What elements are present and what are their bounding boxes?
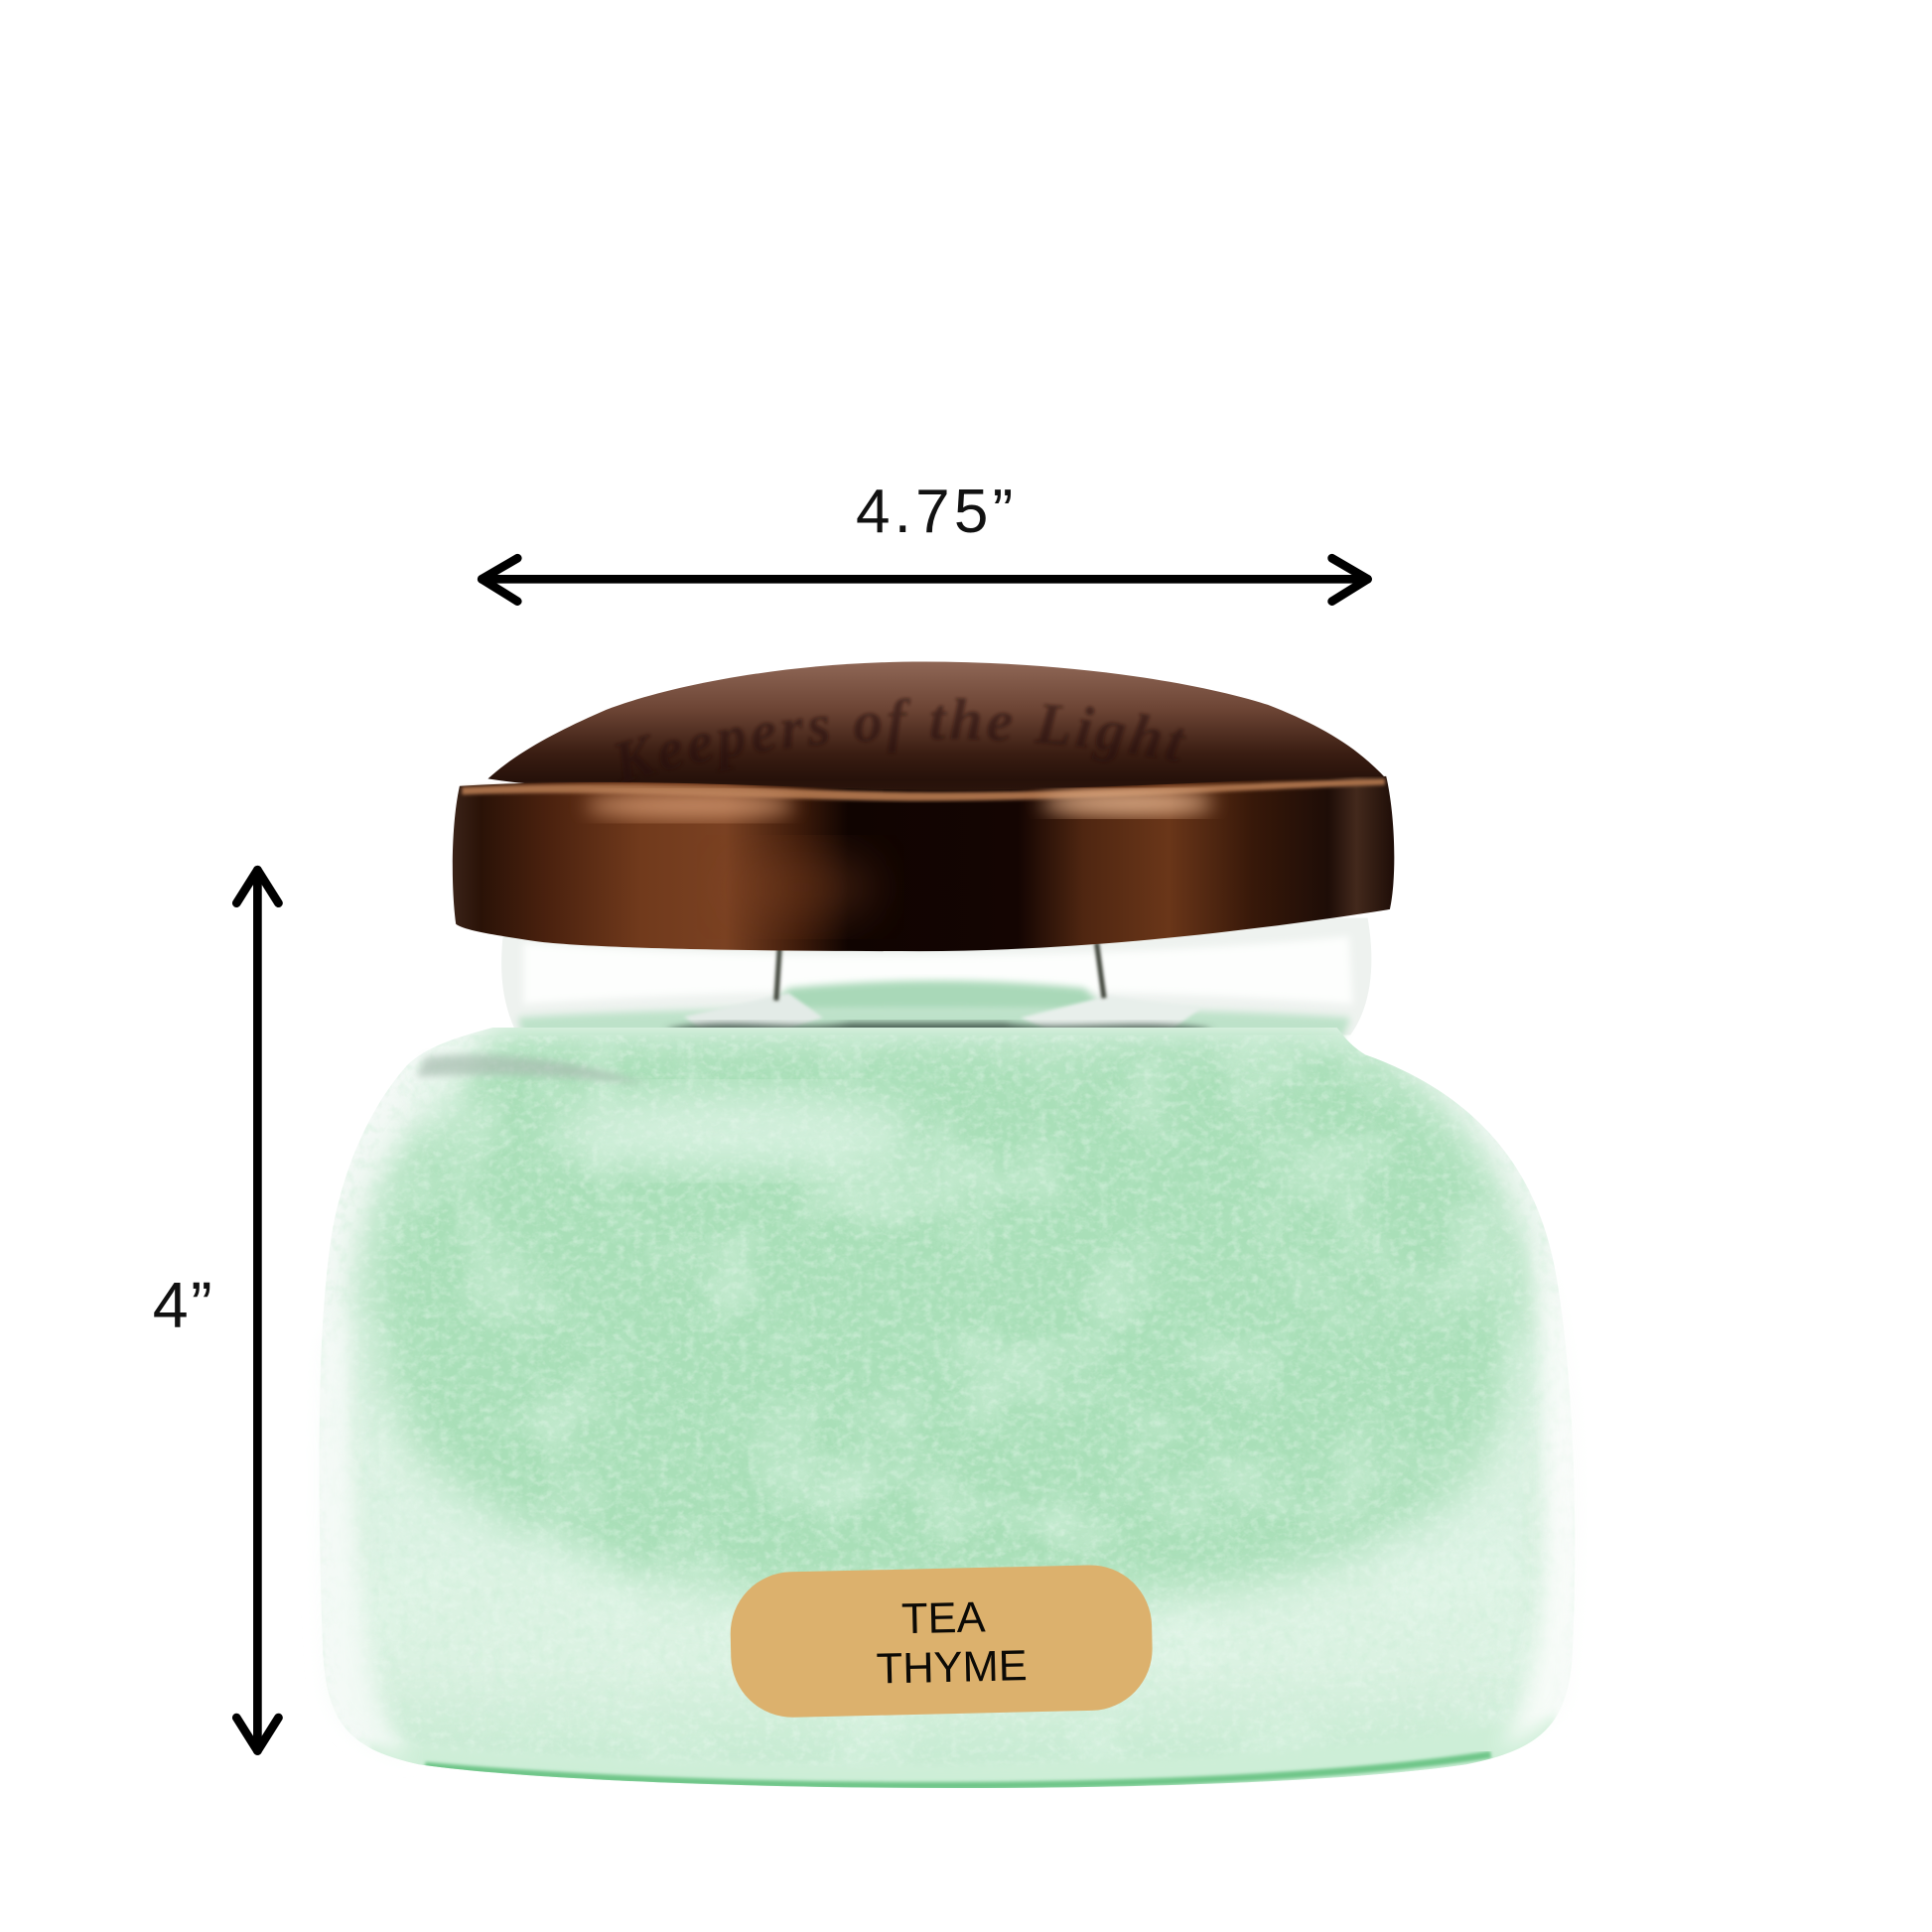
lid band highlights <box>462 778 1385 924</box>
wax fill <box>308 1033 1589 1811</box>
width label: 4.75” <box>856 478 1017 546</box>
width arrow <box>482 558 1368 602</box>
wax texture <box>308 1035 1589 1799</box>
height label: 4” <box>153 1270 214 1341</box>
name label <box>729 1564 1154 1719</box>
glass shoulder reflection <box>416 1054 647 1084</box>
label plate <box>729 1564 1154 1719</box>
label text: TEA <box>901 1593 986 1643</box>
lid dome <box>487 661 1386 796</box>
infographic canvas <box>154 489 1575 1788</box>
lid band <box>453 776 1394 951</box>
wicks <box>776 942 1104 1001</box>
jar neck glass <box>501 918 1371 1037</box>
height arrow <box>236 870 278 1751</box>
glass side highlights <box>321 1307 413 1759</box>
lid <box>453 661 1394 951</box>
lid engraving: Keepers of the Light <box>617 697 1185 766</box>
label text: THYME <box>876 1642 1028 1694</box>
height dimension <box>153 870 278 1751</box>
bottom green base <box>368 1716 1556 1788</box>
jar body glass <box>320 1028 1575 1788</box>
wax highlight <box>548 1094 918 1169</box>
width dimension <box>482 478 1368 602</box>
candle jar photo <box>268 661 1575 1788</box>
